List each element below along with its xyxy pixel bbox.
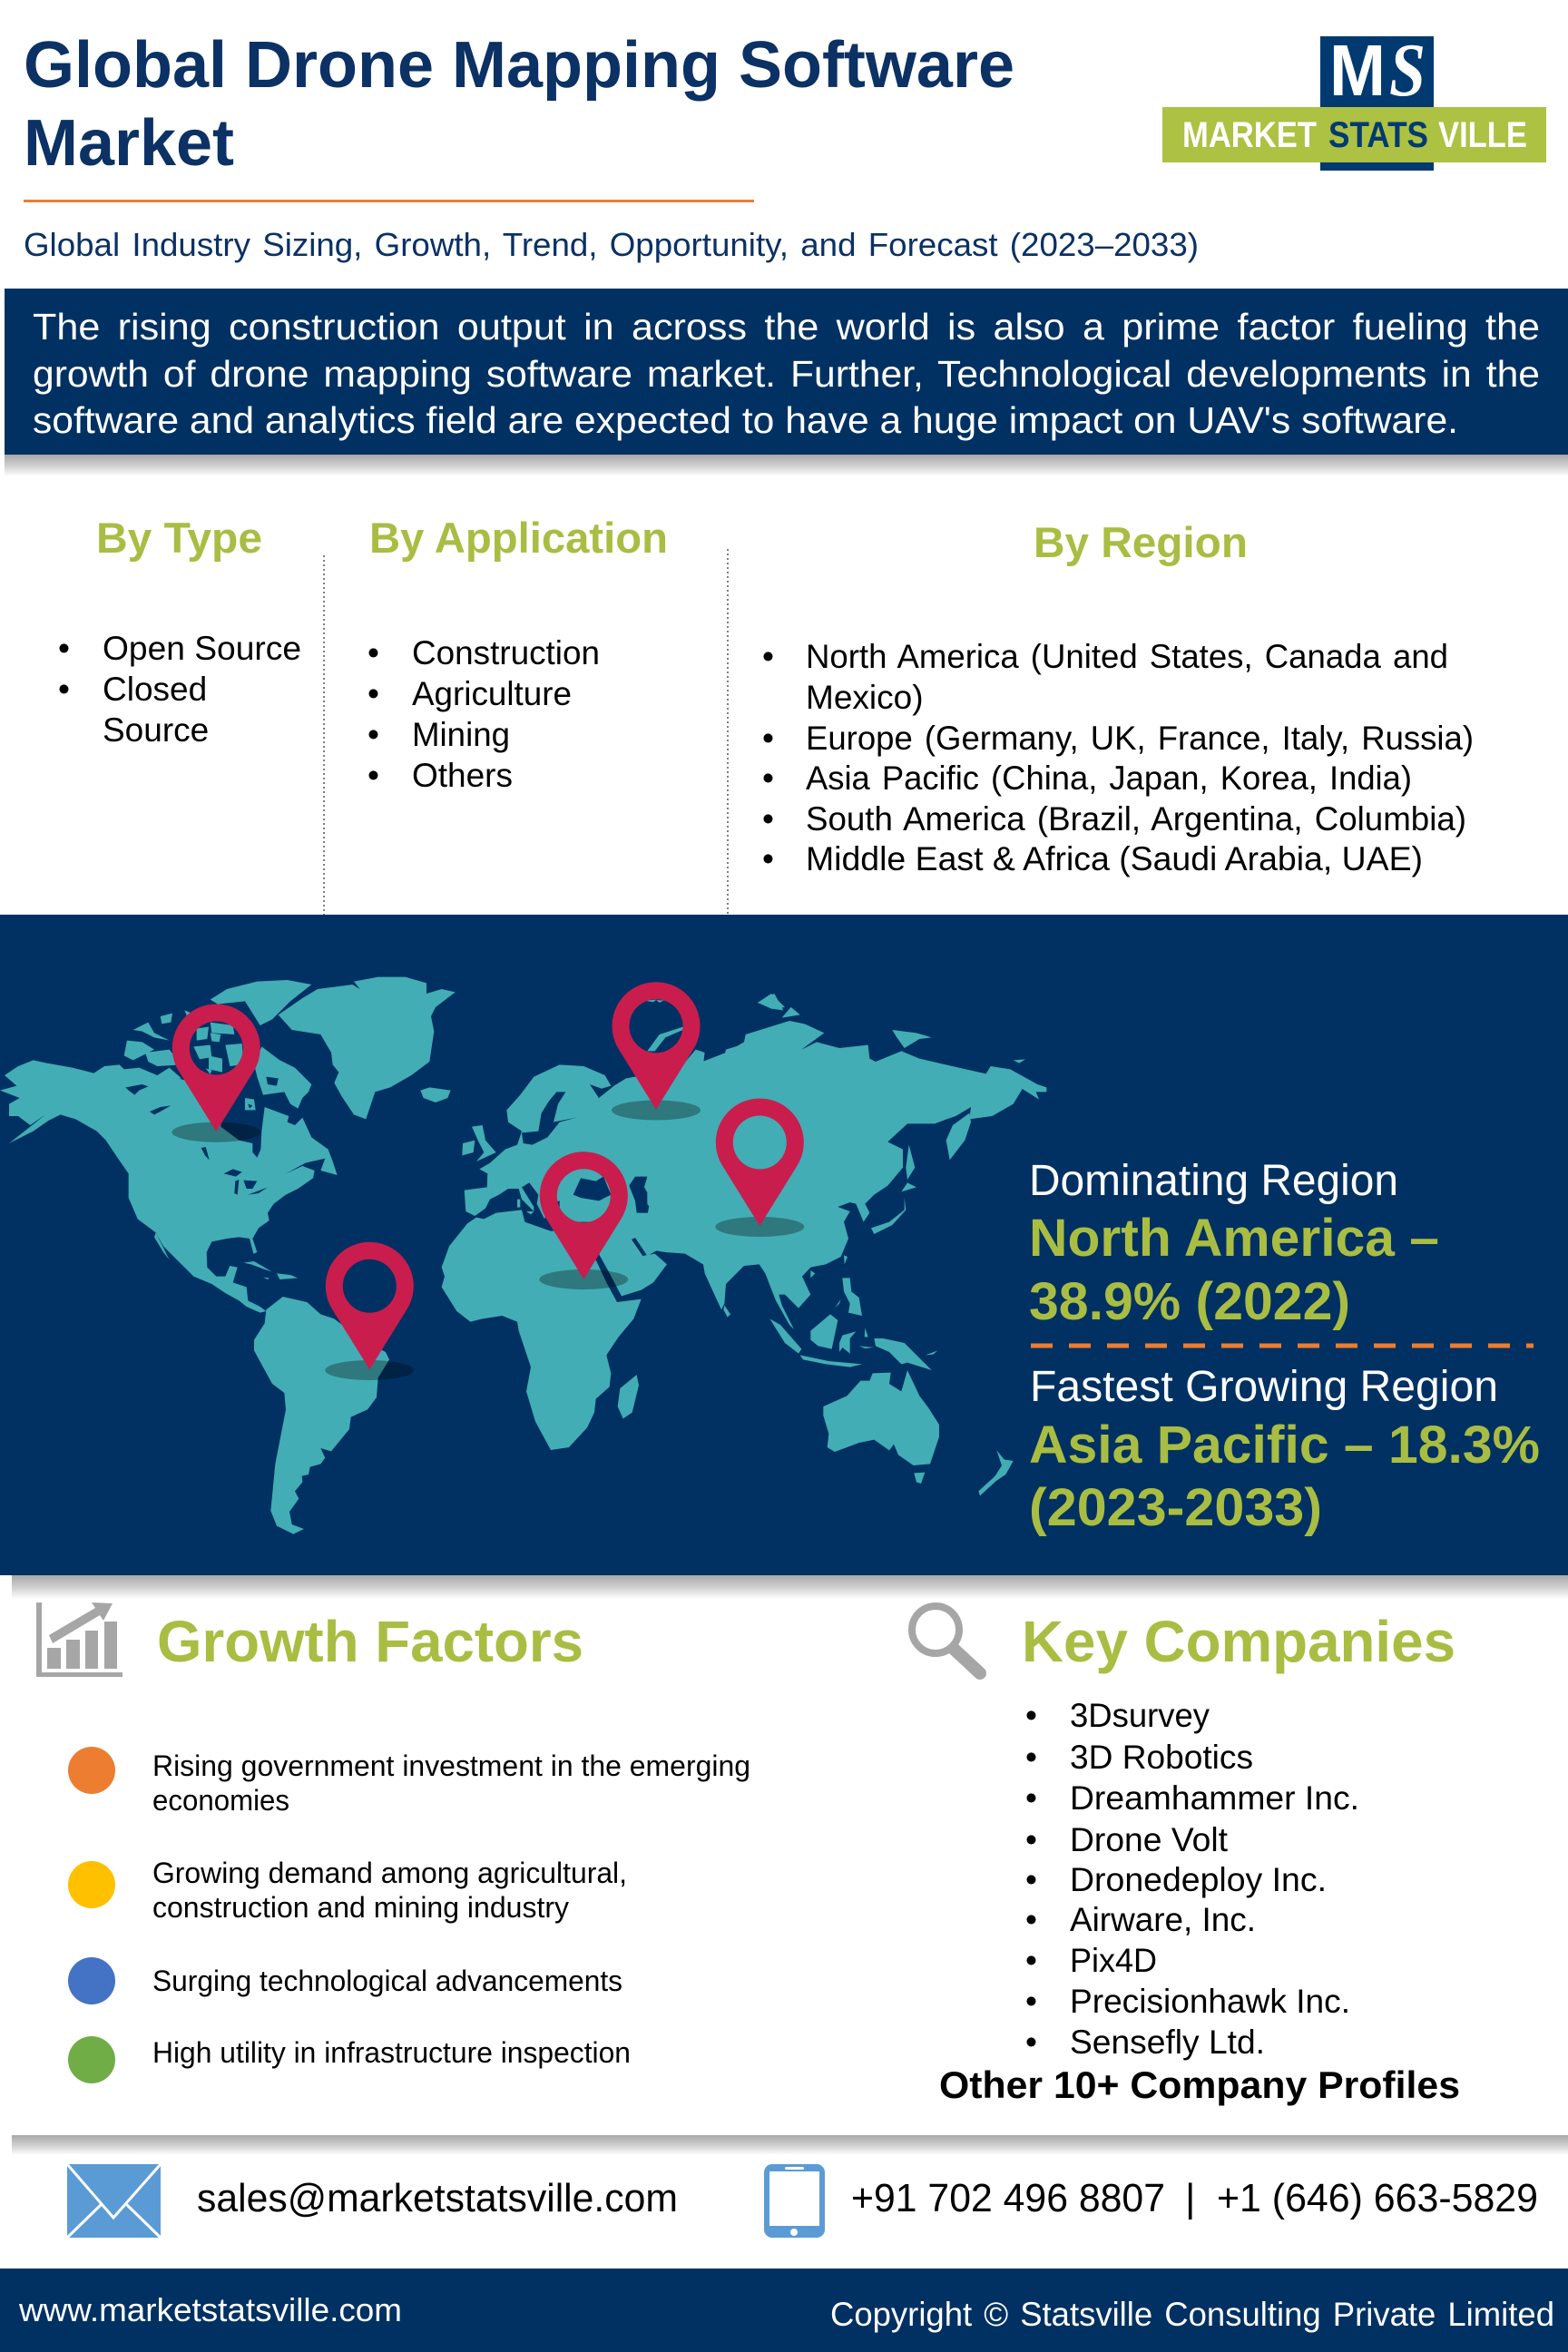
list: regions: Asia Pacific (China, Japan, Korea, India) [806,760,1412,797]
callout divider [1031,1343,1534,1348]
copyright: Copyright © Statsville Consulting Private Limited [830,2296,1554,2333]
list: companies: Airware, Inc. [1070,1901,1256,1938]
callout: fastest growing region: Asia Pacific – 18.3% [1029,1416,1540,1475]
title: Market [24,107,234,180]
list: applications [368,634,600,794]
list: types: Source [103,711,209,749]
world map [0,977,1046,1534]
list: companies: Sensefly Ltd. [1070,2024,1265,2061]
list: regions: Mexico) [806,679,924,716]
phone numbers: +91 702 496 8807 [851,2176,1165,2220]
logo: M [1329,30,1386,111]
south america [254,1297,389,1534]
factor: government investment: Rising government investment in the emerging [152,1749,750,1782]
panel shadow [12,2135,1568,2155]
icon: magnifier [912,1606,980,1673]
factor: growing demand [68,1857,627,1924]
callout: dominating region [1029,1157,1439,1331]
list: types: • [58,630,70,667]
panel: by application [368,514,668,794]
logo: MARKET [1182,115,1317,155]
list: applications: • [368,716,379,753]
list: regions: • [762,638,774,675]
company profiles note: Other 10+ Company Profiles [939,2063,1460,2106]
list: companies: • [1025,1739,1037,1776]
pin: north america [172,1004,260,1132]
list: regions: Middle East & Africa (Saudi Arabia, UAE) [806,840,1423,877]
east asia [647,994,1046,1370]
factor: infrastructure inspection [68,2036,631,2083]
icon: envelope [67,2164,161,2238]
callout: fastest growing region: Fastest Growing Region [1030,1363,1498,1411]
icon: growth chart [36,1602,122,1677]
column divider [727,549,729,915]
factor: growing demand: Growing demand among agricultural, [152,1857,627,1889]
email: sales@marketstatsville.com [197,2176,678,2220]
footer [0,2269,1568,2352]
contact row [67,2164,1538,2238]
oceania [823,1370,1014,1495]
list: regions: • [762,800,774,838]
location pins [172,982,804,1369]
title: Global Drone Mapping Software [24,29,1014,102]
mediterranean islands and arctic russia [517,994,800,1214]
factor: technological advancements [68,1957,622,2004]
list: types: Open Source [103,630,301,667]
title rule [24,200,754,202]
list: companies: • [1025,1942,1037,1979]
band shadow [12,1575,1568,1599]
intro banner: The rising construction output in across the world is also a prime factor fueling the [33,306,1540,348]
list: companies: 3Dsurvey [1070,1697,1210,1734]
africa and madagascar [442,994,800,1450]
logo [1162,28,1546,171]
pin: russia [612,982,701,1110]
header [24,29,1199,263]
factor: infrastructure inspection: High utility in infrastructure inspection [152,2036,631,2069]
list: regions: Europe (Germany, UK, France, Italy, Russia) [806,720,1474,757]
list: regions: • [762,760,774,797]
list: companies: • [1025,1779,1037,1817]
callout: dominating region: 38.9% (2022) [1029,1272,1350,1331]
title [24,29,1014,180]
logo: STATS [1328,115,1428,155]
list: companies: Dreamhammer Inc. [1070,1779,1359,1817]
list: applications: Agriculture [412,675,572,712]
pin shadows [172,1100,804,1380]
intro banner [5,289,1568,476]
iceland [420,1087,451,1102]
list: types [58,630,301,749]
intro banner: software and analytics field are expected to have a huge impact on UAV's software. [33,399,1458,441]
list: applications: • [368,675,379,712]
list: types: • [58,671,70,708]
pin: middle east [540,1152,628,1279]
list: regions: • [762,840,774,877]
list: applications: Mining [412,716,510,753]
pin: south america [326,1242,414,1369]
heading: key companies: Key Companies [1022,1609,1455,1674]
list: regions: North America (United States, Canada and [806,638,1448,675]
logo: VILLE [1438,115,1527,155]
website: www.marketstatsville.com [18,2291,402,2328]
list: companies: Dronedeploy Inc. [1070,1861,1327,1898]
callout: dominating region: North America – [1029,1209,1439,1268]
canadian lakes [125,1064,279,1195]
subtitle: Global Industry Sizing, Growth, Trend, Opportunity, and Forecast (2023–2033) [24,226,1199,263]
list: companies: 3D Robotics [1070,1739,1253,1776]
logo: S [1389,28,1426,113]
panel: growth factors [36,1602,750,2083]
callout: dominating region: Dominating Region [1029,1157,1398,1205]
list: companies: Pix4D [1070,1942,1157,1979]
panel: by type [58,514,301,749]
panel: map band [0,915,1568,1575]
panel: key companies [912,1606,1460,2106]
list: types: Closed [103,671,207,708]
british isles [462,1125,496,1161]
panel: by region [762,518,1474,877]
list: applications: Others [412,757,513,794]
intro banner: growth of drone mapping software market. Further, Technological developments in the [33,353,1540,395]
callout: fastest growing region: (2023-2033) [1029,1478,1322,1537]
list: companies: Precisionhawk Inc. [1070,1983,1350,2020]
list: regions: South America (Brazil, Argentina, Columbia) [806,800,1466,838]
icon: phone [764,2164,825,2238]
greenland [279,977,456,1119]
factor: growing demand: construction and mining industry [152,1891,569,1924]
list: applications: Construction [412,634,600,671]
heading: by type: By Type [96,514,262,562]
list: regions: • [762,720,774,757]
caribbean [154,1232,298,1279]
phone numbers: +1 (646) 663-5829 [1217,2176,1538,2220]
list: applications: • [368,634,379,671]
list: companies: • [1025,1821,1037,1858]
list: companies: Drone Volt [1070,1821,1229,1858]
list: companies: • [1025,1697,1037,1734]
list: companies: • [1025,1861,1037,1898]
column divider [323,555,325,915]
inland seas [522,1053,717,1213]
factor: technological advancements: Surging technological advancements [152,1965,622,1997]
list: companies: • [1025,1983,1037,2020]
americas and arctic [0,977,456,1313]
list: regions [762,638,1474,877]
heading: growth factors: Growth Factors [157,1609,583,1674]
heading: by application: By Application [369,514,668,562]
list: applications: • [368,757,379,794]
phone numbers: | [1185,2176,1195,2220]
list: companies: • [1025,2024,1037,2061]
pin: china [716,1099,804,1226]
heading: by region: By Region [1034,518,1248,566]
list: companies: • [1025,1901,1037,1938]
factor: government investment [68,1747,750,1817]
factor: government investment: economies [152,1784,289,1817]
list: companies [1025,1697,1359,2061]
callout: fastest growing region [1029,1363,1540,1537]
phone numbers [851,2176,1538,2220]
europe and west asia [465,1044,760,1296]
